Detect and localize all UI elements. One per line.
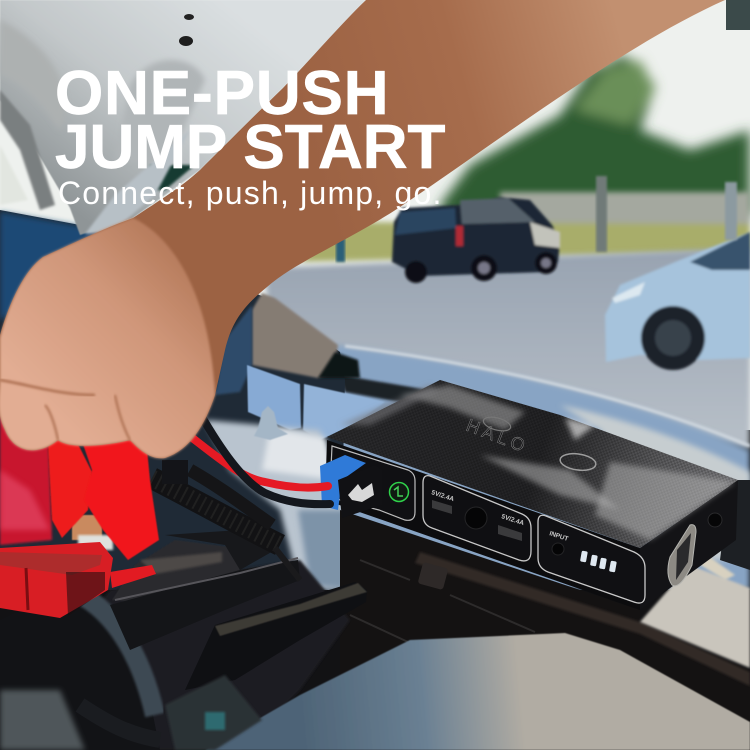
carbon-fibre top	[327, 380, 738, 548]
clamp terminal and small red parts	[0, 515, 156, 618]
corrugated cable loom	[152, 460, 300, 580]
jumper cables	[182, 405, 330, 504]
battery stud	[254, 406, 288, 440]
SUV in the distance	[392, 197, 560, 283]
blurred foreground cables	[0, 690, 85, 750]
device: portable jump starter: 5V/2.4A	[430, 489, 455, 503]
red clamp handle	[0, 410, 159, 560]
reflections on top	[340, 385, 735, 540]
car battery	[110, 530, 300, 650]
device: portable jump starter	[320, 380, 738, 610]
foreground clips	[165, 675, 262, 750]
title	[55, 59, 446, 182]
device logo: HALO	[464, 415, 531, 457]
vehicle hood in blue	[330, 345, 750, 590]
title: JUMP START	[55, 113, 445, 182]
plastic handle	[185, 582, 367, 690]
large grey cover	[205, 633, 750, 750]
raised hood underside	[0, 0, 366, 235]
title: ONE-PUSH	[55, 59, 389, 128]
engine bay: panels around the device	[0, 210, 385, 640]
device: portable jump starter: 5V/2.4A	[500, 513, 525, 527]
device: portable jump starter: INPUT	[548, 530, 569, 543]
posts	[596, 176, 607, 252]
subtitle: Connect, push, jump, go.	[58, 175, 443, 211]
arm and hand	[0, 0, 725, 458]
lower engine components	[0, 510, 750, 750]
input panel	[538, 515, 645, 603]
power button panel	[330, 446, 415, 520]
blue parked car	[605, 232, 750, 370]
background: outdoor parking lot	[0, 0, 750, 450]
jump cable connector	[320, 455, 366, 510]
AC outlet	[668, 525, 696, 586]
device body front	[325, 440, 640, 610]
USB panel	[423, 476, 531, 561]
